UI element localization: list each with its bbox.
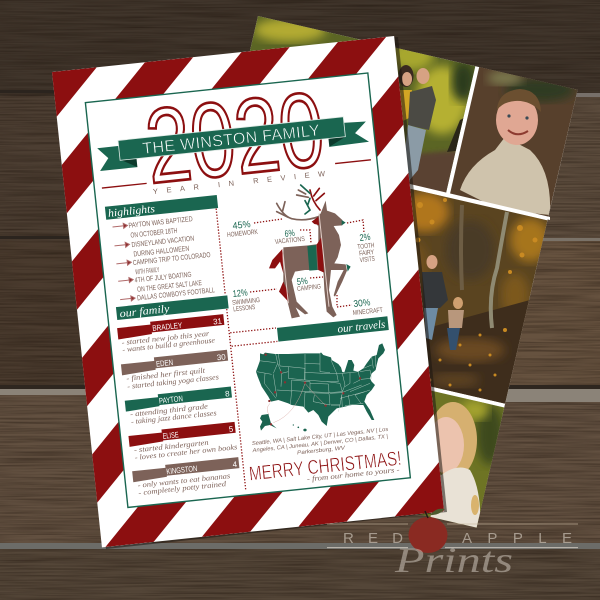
highlights list: DURING HALLOWEEN [133, 244, 190, 258]
camping: 5% [296, 276, 309, 288]
chart labels: percentages [224, 206, 383, 329]
brand word APPLE: APPLE [462, 530, 572, 547]
member: Payton: PAYTON [159, 394, 183, 406]
watermark: Red Apple Prints [327, 509, 578, 580]
member: Elise: - loves to create her own books [134, 442, 238, 462]
apple icon [408, 509, 448, 553]
our family heading: our family [119, 303, 170, 320]
swimming lessons: SWIMMING [232, 297, 260, 307]
photo: father and child in autumn woods [410, 188, 548, 404]
our travels bar: our travels [337, 319, 386, 336]
map caption [251, 427, 390, 461]
map caption: Angeles, CA | Juneau, AK | Denver, CO | Dallas, TX | [251, 434, 389, 454]
homework: 45% [232, 219, 252, 232]
member: Eden: - started taking yoga classes [127, 372, 219, 391]
member: Bradley: - started new job this year [121, 329, 210, 347]
member: Payton: - attending third grade [130, 401, 209, 419]
destination markers [264, 353, 361, 425]
photo: boy portrait [450, 67, 578, 216]
panel: highlights [105, 195, 227, 305]
highlights list: DALLAS COWBOYS FOOTBALL [137, 285, 215, 302]
red candy stripes [52, 37, 444, 547]
highlights list: 4TH OF JULY BOATING [134, 270, 192, 284]
vacations [274, 227, 306, 246]
subtitle: YEAR IN REVIEW [153, 169, 326, 196]
member: Payton: 8 [225, 389, 231, 399]
tooth fairy visits: FAIRY [359, 249, 375, 258]
list arrows [112, 223, 135, 302]
chart: US map [256, 343, 385, 431]
icon: reindeer [269, 185, 351, 318]
highlights list: CAMPING TRIP TO COLORADO [132, 250, 211, 267]
highlights list: WITH FAMILY [135, 265, 160, 276]
camping: CAMPING [297, 283, 321, 293]
swimming lessons [231, 286, 261, 313]
swimming lessons: LESSONS [233, 304, 256, 313]
photo: little girl [419, 390, 504, 528]
member: Elise: - started kindergarten [133, 438, 209, 454]
family name: THE WINSTON FAMILY [142, 122, 321, 158]
member: Eden: EDEN [156, 358, 174, 369]
boy sweater [460, 137, 550, 215]
member: Elise: ELISE [162, 430, 179, 441]
highlights list [128, 213, 215, 302]
member: Eden [121, 350, 230, 391]
father figure [422, 272, 448, 308]
member: Kingston: - only wants to eat bananas [137, 471, 231, 490]
boy head [496, 100, 538, 145]
vacations: VACATIONS [275, 236, 306, 246]
girl hair and face [434, 402, 477, 474]
alaska and hawaii [260, 414, 307, 431]
minecraft [351, 296, 383, 317]
homework [226, 218, 259, 239]
autumn leaves [416, 198, 538, 392]
highlights list: PAYTON WAS BAPTIZED [128, 214, 193, 230]
tooth fairy visits [356, 232, 376, 264]
child figure [448, 310, 464, 328]
red rump [269, 249, 288, 302]
deer body [283, 201, 347, 318]
merry christmas: MERRY CHRISTMAS! [248, 448, 402, 486]
panel: our family [115, 295, 247, 498]
map caption: Seattle, WA | Salt Lake City, UT | Las Vegas, NV | Los [252, 427, 389, 447]
tooth fairy visits: TOOTH [357, 242, 375, 251]
tooth fairy visits: VISITS [360, 256, 376, 264]
photo collage card [250, 16, 578, 528]
greeting card [52, 36, 444, 548]
girl dress [430, 468, 480, 530]
brand word Prints: Prints [394, 540, 513, 580]
tooth fairy visits: 2% [359, 232, 372, 244]
highlights list: ON OCTOBER 18TH [130, 226, 178, 240]
member: Elise: 5 [228, 424, 234, 434]
member: Kingston [132, 457, 241, 498]
state borders [257, 353, 376, 412]
minecraft: MINECRAFT [353, 307, 383, 317]
camping [296, 275, 321, 293]
nose and hoof [342, 220, 351, 272]
member: Kingston: KINGSTON [166, 464, 198, 476]
map caption: Parkersburg, WV [297, 445, 347, 456]
green blanket [307, 245, 317, 271]
member: Eden: 30 [216, 352, 227, 362]
member: Bradley: - wants to build a greenhouse [122, 335, 216, 354]
member: Bradley: 31 [213, 317, 223, 327]
birch trunk [491, 212, 507, 328]
photo: parents in forest [250, 16, 476, 192]
red neck band [312, 217, 324, 273]
travel routes [267, 383, 326, 423]
member: Eden: - finished her first quilt [126, 366, 206, 383]
heading: 2020: 2020 [140, 70, 330, 206]
rule left [102, 183, 147, 189]
ribbon banner [97, 114, 369, 171]
lower 48 states [256, 343, 385, 426]
member: Kingston: - completely potty trained [138, 479, 227, 497]
highlights list: DISNEYLAND VACATION [131, 234, 195, 249]
member: Payton: - taking jazz dance classes [131, 408, 217, 426]
brand word RED: RED [343, 530, 403, 547]
minecraft: 30% [353, 297, 371, 310]
member: Payton [124, 387, 234, 427]
member: Bradley [117, 314, 226, 354]
rule right [335, 159, 371, 164]
homework: HOMEWORK [227, 229, 259, 239]
highlights heading: highlights [108, 203, 156, 220]
our travels bar [277, 316, 389, 342]
member: Kingston: 4 [232, 460, 238, 469]
pale accent lines [283, 213, 329, 307]
antlers [277, 185, 324, 220]
highlights list: ON THE GREAT SALT LAKE [137, 278, 202, 294]
card shadow [55, 37, 447, 549]
dotted divider [216, 204, 292, 490]
chart connector dots [250, 219, 364, 307]
vacations: 6% [284, 228, 296, 240]
closing line: - from our home to yours - [306, 465, 400, 484]
member: Bradley: BRADLEY [152, 321, 183, 333]
swimming lessons: 12% [232, 287, 249, 300]
inner white panel [85, 73, 410, 507]
member: Elise [128, 422, 238, 462]
couple figures [398, 65, 436, 182]
